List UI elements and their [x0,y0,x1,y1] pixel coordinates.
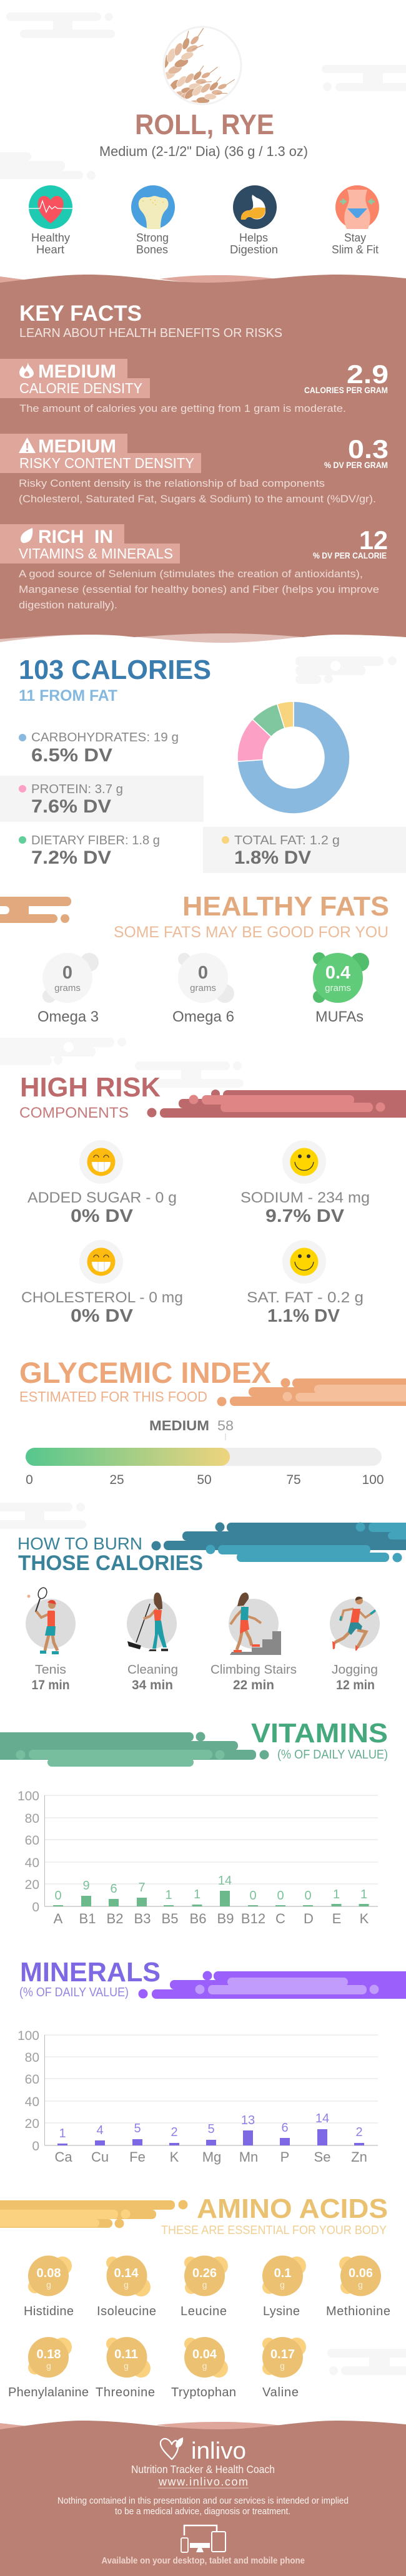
amino: histidine: g [46,2280,51,2290]
bar chart: minerals: 60 [25,2072,39,2087]
gauge value [149,1418,234,1440]
banner: vitamins [0,1732,269,1767]
activity: cleaning: Cleaning [127,1663,178,1677]
amino: isoleucine: g [124,2280,129,2290]
fact: rich in vitamins and minerals: Manganese (essential for healthy bones) and Fiber (helps you improve [19,584,379,595]
amino: tryptophan: Tryptophan [171,2386,236,2399]
legend: total fat: TOTAL FAT: 1.2 g [234,834,340,847]
bar chart: vitamins: B6 [190,1911,206,1926]
activity: tennis [26,1586,76,1692]
amino: tryptophan [171,2337,236,2399]
panel: glycemic index [19,1356,406,1487]
amino: lysine: g [280,2280,285,2290]
activity: climbing stairs [210,1593,297,1692]
fact: calorie density: 2.9 [347,359,389,389]
gauge axis: 100 [362,1473,384,1487]
item: saturated fat: SAT. FAT - 0.2 g [247,1289,364,1306]
bar chart: vitamins: 1 [360,1888,367,1901]
metric: mufas: grams [325,983,351,993]
bar chart: vitamins: E [332,1911,341,1926]
bar chart: vitamins: B9 [217,1911,234,1926]
bar chart: vitamins: 1 [333,1888,340,1901]
benefit: stay slim and fit: Stay [344,232,366,244]
gauge value: MEDIUM [149,1418,209,1433]
metric: omega 3 [37,953,99,1025]
amino: leucine: Leucine [181,2305,227,2318]
bar chart: vitamins: B12 [241,1911,265,1926]
amino: lysine: 0.1 [274,2266,291,2280]
amino: phenylalanine: 0.18 [37,2348,61,2361]
banner: burn calories [151,1523,406,1563]
fact: risky content density: % DV PER GRAM [324,460,388,470]
bar chart: vitamins: B2 [107,1911,123,1926]
fact: rich in vitamins and minerals [0,524,388,611]
amino: threonine: g [124,2361,129,2371]
activity: tennis: Tenis [35,1663,66,1677]
item: cholesterol: 0% DV [71,1306,134,1326]
bar chart: vitamins: 14 [218,1874,232,1888]
fact: rich in vitamins and minerals: 12 [359,525,388,555]
amino: histidine: Histidine [24,2305,74,2318]
heading: glycemic index: GLYCEMIC INDEX [19,1356,271,1389]
item: sodium: SODIUM - 234 mg [240,1189,370,1206]
benefit: strong bones: Bones [136,243,168,256]
banner: glycemic index [217,1378,406,1407]
benefit: healthy heart: Heart [36,243,64,256]
amino: tryptophan: g [202,2361,207,2371]
item: sodium [240,1140,370,1226]
icon: warning triangle [19,437,36,453]
heading: how to burn: HOW TO BURN [17,1534,142,1553]
fact: rich in vitamins and minerals: VITAMINS & MINERALS [19,545,173,562]
benefit: helps digestion: Digestion [230,243,278,256]
amino: methionine: 0.06 [349,2266,373,2280]
panel: amino acids [0,2193,390,2399]
panel: healthy fats [0,891,389,1025]
metric: omega 3: 0 [62,963,72,983]
bar chart: minerals: 5 [207,2122,215,2136]
amino: leucine [181,2255,228,2318]
bar chart: minerals: 13 [241,2114,255,2127]
benefit: helps digestion [230,185,278,256]
bar chart: vitamins [17,1789,378,1926]
amino: tryptophan: 0.04 [192,2348,217,2361]
fact: calorie density [0,359,389,414]
heading: minerals: MINERALS [20,1957,161,1988]
banner: amino acids [0,2200,187,2228]
item: saturated fat [247,1240,364,1326]
panel: footer [0,2421,406,2576]
subheading: THESE ARE ESSENTIAL FOR YOUR BODY [161,2223,387,2237]
gauge axis: 75 [286,1473,301,1487]
fact: rich in vitamins and minerals: A good source of Selenium (stimulates the creation of antioxidants), [19,568,363,580]
fact: risky content density: RISKY CONTENT DENSITY [19,455,194,471]
legend: protein [0,776,204,822]
bar chart: minerals: Fe [129,2149,146,2165]
metric: omega 3: grams [54,983,81,993]
logo: inlivo: inlivo [191,2438,246,2464]
bar chart: vitamins: 0 [277,1889,284,1903]
benefit: strong bones [131,185,175,256]
bar chart: vitamins: B3 [134,1911,151,1926]
activity: climbing stairs: Climbing Stairs [210,1663,297,1677]
fact: risky content density: Risky Content density is the relationship of bad components [19,478,325,489]
logo: inlivo [161,2437,246,2464]
icon: flame [19,362,34,378]
amino: isoleucine [97,2255,156,2318]
fact: calorie density: CALORIE DENSITY [19,380,142,396]
item: sodium: 9.7% DV [265,1206,345,1226]
item: added sugar: ADDED SUGAR - 0 g [27,1189,177,1206]
item: added sugar: 0% DV [71,1206,134,1226]
panel: calories [0,655,406,873]
bar chart: minerals: P [280,2149,289,2165]
benefit: strong bones: Strong [136,232,169,244]
availability note: Available on your desktop, tablet and mobile phone [101,2555,305,2566]
bar chart: vitamins: C [275,1911,285,1926]
benefit: healthy heart: Healthy [31,232,70,244]
heading: vitamins: VITAMINS [251,1718,388,1749]
disclaimer: Nothing contained in this presentation and our services is intended or implied [57,2496,349,2506]
activity: cleaning [127,1593,178,1692]
amino: isoleucine: 0.14 [114,2266,139,2280]
bar chart: vitamins: 1 [194,1888,201,1901]
fact: rich in vitamins and minerals: RICH IN [38,527,113,547]
subheading: components: COMPONENTS [19,1105,129,1121]
disclaimer: to be a medical advice, diagnosis or treatment. [115,2507,290,2517]
bar chart: minerals: Se [314,2149,330,2165]
bar chart: minerals: 20 [25,2117,39,2131]
icon: leaf [21,528,32,543]
amino: lysine: Lysine [263,2305,300,2318]
bar chart: minerals: 2 [171,2125,178,2139]
legend: protein: PROTEIN: 3.7 g [31,783,123,796]
heading: key facts: KEY FACTS [19,301,142,326]
bar chart: vitamins: 9 [82,1879,90,1893]
fact: risky content density [0,434,389,505]
heading: calories: 103 CALORIES [19,655,211,685]
legend: carbohydrates: CARBOHYDRATES: 19 g [31,731,179,744]
panel: minerals [17,1957,406,2165]
bar chart: minerals: Cu [91,2149,109,2165]
panel: how to burn calories [0,1503,406,1692]
amino: valine: Valine [262,2386,299,2399]
bar chart: vitamins: K [360,1911,369,1926]
item: cholesterol [21,1240,183,1326]
benefit: healthy heart [29,185,72,256]
background cloud: amino acids [327,2349,406,2375]
bar chart: vitamins: D [304,1911,314,1926]
icon: devices [181,2525,225,2552]
fact: risky content density: (Cholesterol, Saturated Fat, Sugars & Sodium) to the amount (%DV/gr). [19,494,376,505]
bar chart: vitamins: 0 [304,1889,312,1903]
activity: tennis: 17 min [31,1678,70,1692]
amino: leucine: 0.26 [192,2266,217,2280]
panel: high risk components [19,1072,406,1326]
amino: histidine: 0.08 [37,2266,61,2280]
bar chart: minerals: Zn [351,2149,367,2165]
amino: methionine: Methionine [326,2305,390,2318]
legend: dietary fiber [19,834,160,868]
bar chart: vitamins: 0 [32,1900,39,1915]
activity: jogging [330,1597,380,1692]
amino: threonine [96,2337,155,2399]
bar chart: minerals: Mn [239,2149,258,2165]
legend: carbohydrates [19,731,179,766]
subheading: SOME FATS MAY BE GOOD FOR YOU [114,924,389,941]
activity: jogging: Jogging [332,1663,378,1677]
amino: valine: 0.17 [270,2348,295,2361]
fact: rich in vitamins and minerals: digestion naturally). [19,600,117,611]
heading: high risk: HIGH RISK [20,1072,161,1103]
activity: climbing stairs: 22 min [233,1678,274,1692]
background clouds: header [0,12,406,180]
benefit: helps digestion: Helps [239,232,268,244]
heading: healthy fats: HEALTHY FATS [182,891,389,922]
gauge value: 58 [217,1418,234,1433]
bar chart: minerals: 80 [25,2051,39,2065]
food photo: rye ears [162,26,242,105]
gauge axis: 25 [109,1473,124,1487]
subheading: LEARN ABOUT HEALTH BENEFITS OR RISKS [19,326,282,340]
bar chart: vitamins: 100 [17,1789,39,1803]
metric: omega 3: Omega 3 [37,1008,99,1025]
subheading: (% OF DAILY VALUE) [19,1986,129,1999]
fact: calorie density: MEDIUM [38,361,116,382]
bar chart: vitamins: 6 [110,1882,117,1896]
banner: high risk [147,1090,406,1118]
subheading: from fat: 11 FROM FAT [19,687,117,705]
item: saturated fat: 1.1% DV [267,1306,340,1326]
gauge axis: 0 [26,1473,33,1487]
amino: threonine: Threonine [96,2386,155,2399]
activity: jogging: 12 min [336,1678,375,1692]
panel: key facts [0,275,406,643]
benefit: stay slim and fit: Slim & Fit [332,243,379,256]
bar chart: minerals: 14 [315,2112,329,2125]
legend: protein: 7.6% DV [31,796,111,817]
bar chart: minerals: 2 [355,2125,363,2139]
heading: those calories: THOSE CALORIES [18,1551,203,1575]
banner: minerals [139,1971,406,1999]
bar chart: vitamins: 1 [165,1888,172,1902]
amino: threonine: 0.11 [114,2348,138,2361]
fact: calorie density: CALORIES PER GRAM [304,385,388,395]
item: cholesterol: CHOLESTEROL - 0 mg [21,1289,183,1306]
background clouds: high risk [0,1038,244,1088]
gauge bar [26,1448,382,1466]
fact: calorie density: The amount of calories you are getting from 1 gram is moderate. [19,403,346,414]
bar chart: vitamins: 20 [25,1878,39,1892]
bar chart: vitamins: 0 [249,1889,257,1903]
legend: total fat: 1.8% DV [234,847,311,868]
metric: omega 6 [172,953,234,1025]
bar chart: minerals: 0 [32,2139,39,2154]
amino: phenylalanine: Phenylalanine [8,2386,89,2399]
tagline: Nutrition Tracker & Health Coach [131,2463,275,2476]
panel: vitamins [0,1718,388,1926]
metric: mufas: 0.4 [325,963,350,983]
amino: methionine [326,2255,390,2318]
bar chart: minerals: Mg [202,2149,221,2165]
bar chart: vitamins: 80 [25,1812,39,1826]
bar chart: minerals: 40 [25,2095,39,2109]
metric: omega 6: grams [190,983,216,993]
metric: mufas: MUFAs [315,1008,364,1025]
fact: risky content density: 0.3 [348,434,389,464]
bar chart: minerals: 5 [134,2122,141,2135]
legend: carbohydrates: 6.5% DV [31,745,112,766]
donut chart [237,701,350,814]
bar chart: minerals: 1 [59,2127,66,2140]
bar chart: vitamins: B5 [162,1911,178,1926]
legend: dietary fiber: 7.2% DV [31,847,111,868]
activity: cleaning: 34 min [132,1678,173,1692]
amino: phenylalanine: g [46,2361,51,2371]
amino: methionine: g [358,2280,363,2290]
gauge axis: 50 [197,1473,212,1487]
serving size: Medium (2-1/2" Dia) (36 g / 1.3 oz) [99,144,308,159]
legend: dietary fiber: DIETARY FIBER: 1.8 g [31,834,160,847]
amino: phenylalanine [8,2337,89,2399]
bar chart: minerals: 6 [281,2121,289,2135]
subheading: (% OF DAILY VALUE) [277,1748,388,1762]
website link: www.inlivo.com [158,2476,248,2488]
heading: amino acids: AMINO ACIDS [197,2193,388,2224]
amino: isoleucine: Isoleucine [97,2305,156,2318]
bar chart: minerals: 4 [96,2124,104,2137]
amino: valine: g [280,2361,285,2371]
subheading: ESTIMATED FOR THIS FOOD [19,1388,207,1405]
title: ROLL, RYE [135,109,274,140]
amino: lysine [262,2255,306,2318]
fact: risky content density: MEDIUM [38,436,116,457]
banner: healthy fats [0,897,71,923]
bar chart: minerals: K [170,2149,179,2165]
bar chart: vitamins: 0 [54,1889,62,1903]
bar chart: vitamins: A [54,1911,63,1926]
item: added sugar [27,1140,177,1226]
bar chart: vitamins: 7 [138,1881,146,1895]
metric: omega 6: Omega 6 [172,1008,234,1025]
amino: valine [262,2337,306,2399]
amino: leucine: g [202,2280,207,2290]
benefit: stay slim and fit [332,185,379,256]
fact: rich in vitamins and minerals: % DV PER CALORIE [313,550,387,560]
gauge axis [26,1473,384,1487]
metric: mufas [313,952,369,1025]
bar chart: vitamins: 60 [25,1833,39,1848]
bar chart: minerals: 100 [17,2029,39,2043]
legend: total fat [203,827,406,873]
bar chart: vitamins: B1 [79,1911,96,1926]
amino: histidine [24,2255,74,2318]
bar chart: vitamins: 40 [25,1856,39,1870]
bar chart: minerals: Ca [54,2149,72,2165]
bar chart: minerals [17,2029,378,2165]
metric: omega 6: 0 [198,963,208,983]
disclaimer [57,2496,349,2517]
